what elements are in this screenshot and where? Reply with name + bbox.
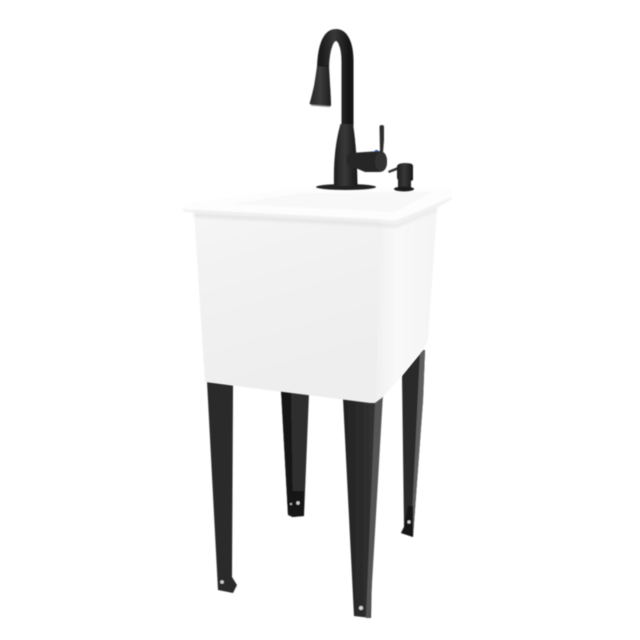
faucet: pull-down spray head	[310, 66, 331, 106]
tub: rim lower edge	[182, 197, 452, 223]
faucet: lever handle	[380, 125, 384, 153]
faucet: mixer cylinder	[347, 151, 387, 172]
tub: rim	[182, 187, 452, 227]
tub: shadow below rim	[194, 208, 437, 227]
tub: side face	[375, 208, 437, 403]
leg: front left	[207, 381, 237, 593]
leg: back right	[401, 350, 425, 537]
leg: front corner	[343, 394, 383, 618]
faucet: tapered body	[334, 124, 358, 186]
soap dispenser	[388, 163, 414, 192]
faucet: gooseneck spout	[323, 35, 348, 126]
tub: body	[194, 208, 437, 403]
dispenser: pump body	[397, 163, 413, 188]
tub: basin opening	[232, 192, 432, 212]
leg: back left	[281, 390, 309, 517]
tub: front face	[194, 213, 384, 403]
faucet	[310, 35, 387, 190]
dispenser: base	[394, 186, 414, 192]
faucet: base plate	[316, 184, 376, 190]
dispenser: pump nozzle	[388, 166, 400, 173]
